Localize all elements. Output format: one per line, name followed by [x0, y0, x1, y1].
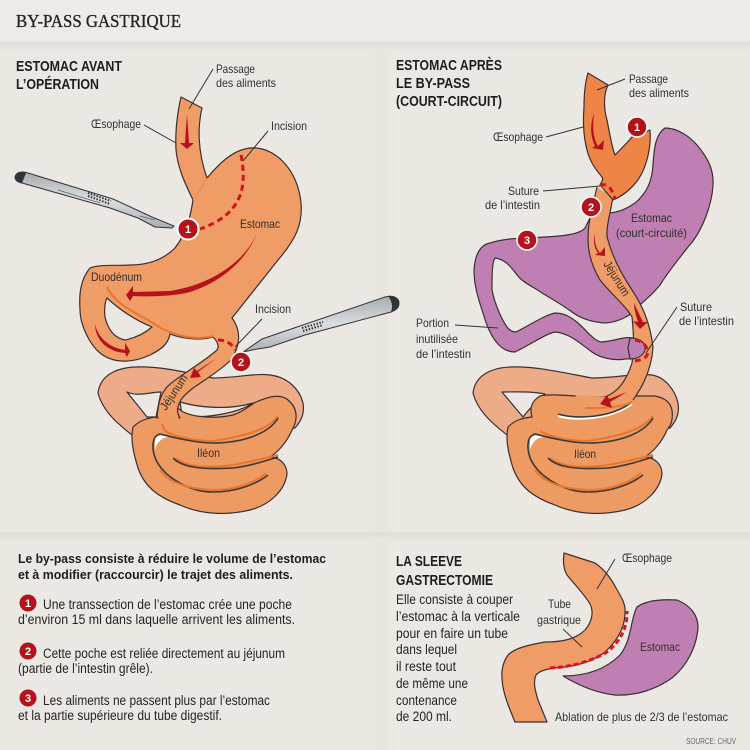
- ileum: [507, 395, 672, 513]
- labels: before: Estomac: [240, 217, 280, 231]
- step 1: 1: [25, 598, 31, 610]
- sleeve text: il reste tout: [396, 659, 456, 674]
- step 3: 3: [25, 693, 31, 705]
- sleeve text: pour en faire un tube: [396, 626, 508, 641]
- heading: sleeve: GASTRECTOMIE: [396, 572, 493, 589]
- panel: explanation text: [18, 551, 326, 723]
- labels: after: Passage: [629, 72, 668, 86]
- labels: after: inutilisée: [416, 332, 458, 346]
- step 2: (partie de l’intestin grêle).: [18, 661, 153, 676]
- sleeve text: l’estomac à la verticale: [396, 609, 520, 624]
- badge 2: 2: [588, 202, 594, 214]
- labels: before: Jéjunum: [157, 372, 191, 413]
- red food arrows: [95, 114, 257, 378]
- step 1: Une transsection de l’estomac crée une poche: [43, 597, 292, 612]
- jejunum to ileum join: [158, 416, 180, 424]
- labels: after: (court-circuité): [616, 226, 687, 240]
- heading: after: LE BY-PASS: [396, 75, 470, 92]
- labels: before: Incision: [255, 302, 291, 316]
- heading: sleeve: LA SLEEVE: [396, 553, 462, 570]
- stomach, duodenum and jejunum: [80, 97, 301, 418]
- labels: sleeve: [537, 551, 728, 724]
- heading: before: ESTOMAC AVANT: [16, 58, 122, 75]
- badge 1: 1: [185, 224, 191, 236]
- badge 1: [178, 218, 198, 240]
- labels: before: des aliments: [216, 76, 276, 90]
- labels: after: Iléon: [574, 447, 596, 461]
- heading: after: [396, 57, 502, 110]
- incision lines: [200, 155, 243, 229]
- gastric tube: [502, 553, 625, 722]
- sleeve text: Elle consiste à couper: [396, 592, 513, 607]
- stoma pouch and esophagus: [583, 73, 650, 200]
- icon: scalpel 2: [243, 296, 399, 352]
- heading: sleeve: [396, 553, 493, 589]
- sleeve text: dans lequel: [396, 642, 457, 657]
- heading: before: [16, 58, 122, 93]
- sleeve text: de 200 ml.: [396, 709, 452, 724]
- heading: after: ESTOMAC APRÈS: [396, 57, 502, 74]
- labels: after: des aliments: [629, 86, 689, 100]
- badge 2: [231, 352, 251, 372]
- intro text: [18, 551, 326, 582]
- removed stomach: [563, 600, 698, 695]
- labels: after: Œsophage: [493, 130, 543, 144]
- sleeve text: contenance: [396, 693, 457, 708]
- step 3: [18, 690, 270, 723]
- badge 3: 3: [524, 235, 530, 247]
- labels: before: Iléon: [197, 446, 220, 460]
- panel: sleeve gastrectomy: [396, 551, 737, 746]
- inner orange folds: [107, 287, 213, 338]
- heading: before: L’OPÉRATION: [16, 76, 99, 93]
- step 3: et la partie supérieure du tube digestif.: [18, 708, 222, 723]
- red food arrows: [591, 113, 648, 408]
- intro text: Le by-pass consiste à réduire le volume de l’estomac: [18, 551, 326, 566]
- badge 1: [627, 117, 647, 137]
- source: SOURCE: CHUV: [686, 737, 737, 746]
- labels: before: Incision: [271, 119, 307, 133]
- sleeve text: de même une: [396, 676, 468, 691]
- esophagus crease: [193, 178, 207, 200]
- labels: after: Suture: [680, 300, 712, 314]
- step 2: 2: [25, 646, 31, 658]
- panel: stomach after the by-pass: [396, 57, 734, 513]
- heading: after: (COURT-CIRCUIT): [396, 93, 502, 110]
- labels: sleeve: gastrique: [537, 613, 581, 627]
- labels: sleeve: Ablation de plus de 2/3 de l’estomac: [555, 710, 728, 724]
- purple stump over jejunum: [628, 338, 645, 359]
- labels: after: Suture: [508, 184, 539, 198]
- panel: stomach before the operation: [15, 58, 399, 513]
- sleeve text: [396, 592, 520, 724]
- labels: after: de l’intestin: [679, 314, 734, 328]
- labels: before: [91, 62, 307, 460]
- labels: after: Portion: [416, 316, 449, 330]
- labels: before: Œsophage: [91, 117, 141, 131]
- small intestine, back loop: [98, 367, 303, 450]
- badge 1: 1: [634, 122, 640, 134]
- labels: after: de l’intestin: [416, 347, 471, 361]
- labels: after: [416, 72, 734, 461]
- badge 2: 2: [238, 357, 244, 369]
- step 1: d’environ 15 ml dans laquelle arrivent les aliments.: [18, 612, 295, 627]
- labels: after: de l’intestin: [485, 198, 540, 212]
- step 1: [18, 594, 295, 627]
- staple line: [550, 611, 627, 668]
- step 3: Les aliments ne passent plus par l’estomac: [43, 693, 270, 708]
- title: BY-PASS GASTRIQUE: [16, 11, 181, 31]
- labels: after: Estomac: [631, 211, 672, 225]
- bypassed stomach and unused intestine: [474, 128, 713, 360]
- jejunum connection: [575, 187, 653, 408]
- small intestine, back loop: [473, 367, 678, 450]
- badge 3: [517, 230, 537, 250]
- labels: before: Passage: [216, 62, 255, 76]
- badge 2: [581, 197, 601, 217]
- labels: sleeve: Estomac: [640, 640, 680, 654]
- intro text: et à modifier (raccourcir) le trajet des aliments.: [18, 567, 293, 582]
- suture lines: [600, 185, 615, 199]
- labels: before: Duodénum: [91, 270, 142, 284]
- labels: sleeve: Tube: [548, 597, 571, 611]
- step 2: [18, 642, 285, 676]
- labels: sleeve: Œsophage: [622, 551, 672, 565]
- icon: scalpel 1: [15, 172, 174, 228]
- step 2: Cette poche est reliée directement au jéjunum: [43, 646, 285, 661]
- ileum: [132, 396, 296, 513]
- labels: after: Jéjunum: [600, 258, 633, 299]
